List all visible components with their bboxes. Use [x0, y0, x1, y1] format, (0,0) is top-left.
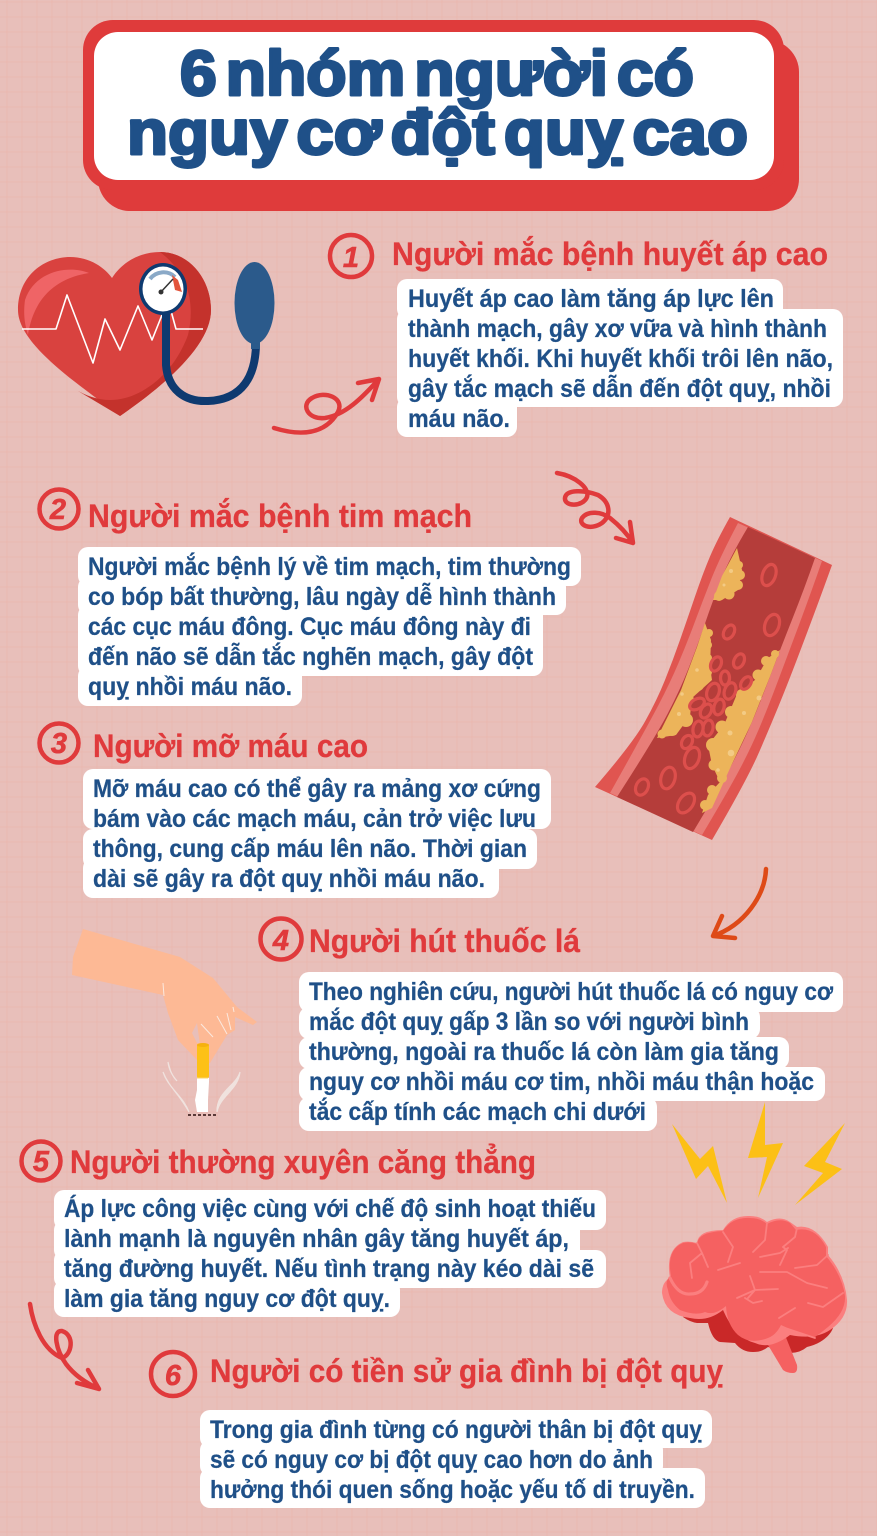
number badge 5 [22, 1142, 60, 1180]
icon: artery with plaque [595, 517, 832, 840]
text block 4: thường, ngoài ra thuốc lá còn làm gia tăng [309, 1038, 779, 1066]
title banner: nguy cơ đột quỵ cao [127, 98, 748, 168]
text block 4: tắc cấp tính các mạch chi dưới [309, 1096, 646, 1126]
text block 1: máu não. [408, 405, 510, 433]
arrow: to artery [557, 473, 633, 543]
panel: section 2 [40, 490, 581, 706]
icon: heart with blood pressure gauge [18, 252, 274, 416]
text block 6: sẽ có nguy cơ bị đột quỵ cao hơn do ảnh [210, 1446, 653, 1474]
text block 1: huyết khối. Khi huyết khối trôi lên não, [408, 345, 833, 373]
text block 3 [83, 769, 551, 898]
text block 2: co bóp bất thường, lâu ngày dễ hình thành [88, 581, 556, 611]
text block 5: làm gia tăng nguy cơ đột quỵ. [64, 1285, 390, 1313]
text block 4 [299, 972, 843, 1131]
number badge 3 [40, 724, 78, 762]
panel: section 4 [260, 918, 843, 1131]
text block 1: Huyết áp cao làm tăng áp lực lên [408, 285, 774, 313]
text block 2: đến não sẽ dẫn tắc nghẽn mạch, gây đột [88, 641, 534, 671]
text block 6 [200, 1410, 712, 1508]
panel: section 5 [22, 1142, 606, 1317]
text block 3: bám vào các mạch máu, cản trở việc lưu [93, 805, 536, 833]
panel: section 3 [40, 724, 551, 898]
number badge 6: 6 [165, 1360, 182, 1392]
text block 5: lành mạnh là nguyên nhân gây tăng huyết áp, [64, 1225, 569, 1253]
number badge 5: 5 [33, 1146, 50, 1178]
heading 5: Người thường xuyên căng thẳng [70, 1144, 536, 1180]
number badge 2 [40, 490, 78, 528]
number badge 1 [330, 235, 372, 277]
brain folds [670, 1223, 843, 1338]
text block 6: Trong gia đình từng có người thân bị đột quỵ [210, 1416, 702, 1444]
panel: section 6 [151, 1352, 723, 1508]
arrow: to section 1 [274, 379, 379, 433]
heading 3: Người mỡ máu cao [93, 728, 368, 764]
text block 5: tăng đường huyết. Nếu tình trạng này kéo dài sẽ [64, 1255, 594, 1283]
number badge 6 [151, 1352, 195, 1396]
icon: lightning bolts [672, 1102, 845, 1205]
text block 6: hưởng thói quen sống hoặc yếu tố di truyền. [210, 1476, 695, 1504]
red blood cells [633, 562, 782, 816]
heading 6: Người có tiền sử gia đình bị đột quỵ [210, 1353, 723, 1389]
text block 4: Theo nghiên cứu, người hút thuốc lá có nguy cơ [309, 978, 833, 1006]
heading 2: Người mắc bệnh tim mạch [88, 498, 472, 534]
text block 3: dài sẽ gây ra đột quỵ nhồi máu não. [93, 865, 485, 893]
arrow: to section 6 [30, 1304, 99, 1389]
title banner [83, 20, 799, 211]
icon: brain [662, 1216, 847, 1373]
text block 4: mắc đột quỵ gấp 3 lần so với người bình [309, 1006, 749, 1036]
number badge 4: 4 [272, 925, 289, 957]
heading 4: Người hút thuốc lá [309, 923, 580, 959]
number badge 4 [260, 918, 302, 960]
text block 4: nguy cơ nhồi máu cơ tim, nhồi máu thận hoặc [309, 1068, 814, 1096]
text block 1 [397, 279, 843, 437]
text block 5: Áp lực công việc cùng với chế độ sinh hoạt thiếu [64, 1194, 596, 1223]
arrow: to section 4 [713, 869, 766, 938]
text block 2: quỵ nhồi máu não. [88, 673, 292, 701]
number badge 1: 1 [343, 242, 359, 274]
text block 3: thông, cung cấp máu lên não. Thời gian [93, 835, 527, 863]
plaque deposits [657, 548, 780, 813]
heading 1: Người mắc bệnh huyết áp cao [392, 236, 828, 272]
text block 2: các cục máu đông. Cục máu đông này đi [88, 613, 531, 641]
text block 2: Người mắc bệnh lý về tim mạch, tim thường [88, 551, 571, 581]
icon: hand stubbing out a cigarette [72, 929, 257, 1115]
number badge 2: 2 [49, 494, 66, 526]
title banner: 6 nhóm người có [180, 39, 694, 109]
number badge 3: 3 [51, 728, 67, 760]
text block 5 [54, 1190, 606, 1317]
text block 1: gây tắc mạch sẽ dẫn đến đột quỵ, nhồi [408, 373, 831, 403]
text block 3: Mỡ máu cao có thể gây ra mảng xơ cứng [93, 775, 541, 803]
text block 2 [78, 547, 581, 706]
panel: section 1 [330, 235, 843, 437]
text block 1: thành mạch, gây xơ vữa và hình thành [408, 315, 827, 343]
